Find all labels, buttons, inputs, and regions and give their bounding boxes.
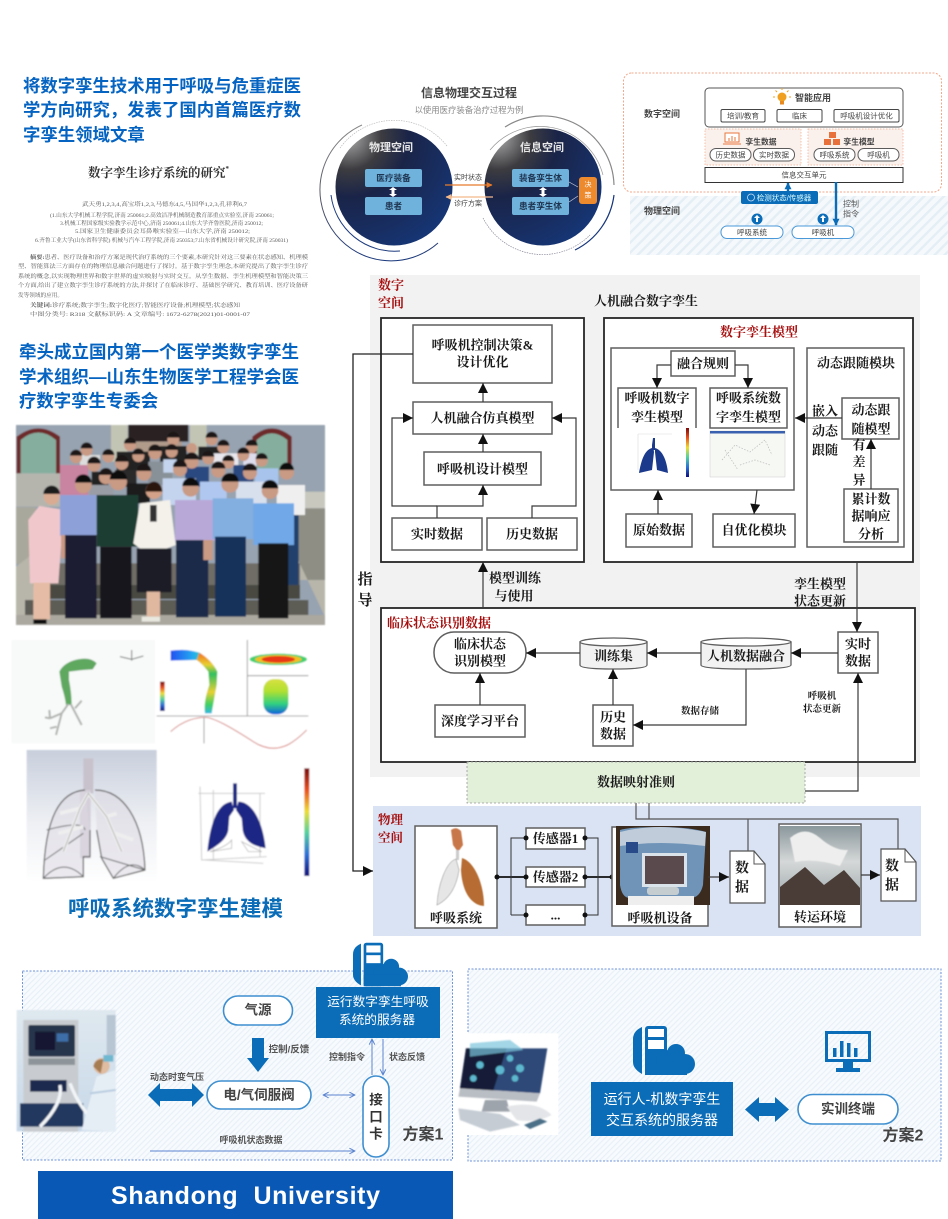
paper abstract: 摘要: 患者、医疗设备和治疗方案是现代治疗系统的三个要素,本研究针对这三要素在状态感知、机理模 <box>30 253 309 261</box>
diagram title: 信息物理交互过程 <box>421 85 517 100</box>
block: real-time data: 实时数据 <box>411 526 463 542</box>
server box <box>316 987 440 1038</box>
paper title: * <box>226 165 230 173</box>
block: raw data: 原始数据 <box>633 522 685 538</box>
label: guidance <box>357 570 373 609</box>
label: ventilator state data: 呼吸机状态数据 <box>219 1134 283 1145</box>
orbit rings <box>320 116 614 261</box>
fusion group <box>611 348 794 490</box>
paper authors and affiliations: 5.国家卫生健康委员会耳鼻喉实验室—山东大学,济南 250012; <box>75 227 251 235</box>
paper abstract: 型、智能算法三方面存在的物理信息融合问题进行了探讨。基于数字孪生理念,本研究提出了数字孪生诊疗 <box>18 262 309 270</box>
smart application panel <box>705 88 903 127</box>
heading: first research statement: 将数字孪生技术用于呼吸与危重症医 <box>23 76 301 96</box>
document: data <box>730 851 765 903</box>
exchange arrows: 诊疗方案 <box>454 198 482 208</box>
block: ventilator design model: 呼吸机设计模型 <box>437 462 528 476</box>
back row hair <box>70 432 268 475</box>
block: raw data <box>626 514 692 547</box>
arrow: uplink <box>787 183 789 191</box>
label: embed tracking: 动态 <box>812 424 839 438</box>
decision box <box>569 177 597 204</box>
panel: clinical state recognition <box>381 608 915 762</box>
icon: cubes <box>824 132 840 145</box>
respiratory system pill: 呼吸系统 <box>737 227 767 237</box>
paper title: 数字孪生诊疗系统的研究 <box>88 166 226 180</box>
server box: 系统的服务器 <box>339 1012 415 1027</box>
label: model training and use: 模型训练 <box>489 570 542 586</box>
icon: monitor chart <box>723 133 741 144</box>
gas source pill: 气源 <box>244 1002 272 1018</box>
footer: Shandong University <box>38 1171 453 1219</box>
paper authors and affiliations: 3.机械工程国家级实验教学示范中心,济南 250061;4.山东大学齐鲁医院,济南 250012; <box>60 219 264 227</box>
block: historical data: 数据 <box>600 726 626 742</box>
icon: cloud server <box>353 943 408 986</box>
twin model panel: 孪生模型 <box>843 136 875 146</box>
digital space dashed frame <box>624 73 942 192</box>
label: embed tracking: 嵌入 <box>812 404 838 418</box>
panel heading: 临床状态识别数据 <box>387 616 491 630</box>
training terminal pill: 实训终端 <box>821 1100 875 1116</box>
arrow: model training <box>482 562 484 608</box>
interface card pill: 口 <box>369 1110 383 1124</box>
block: tracking model: 动态跟 <box>851 402 891 418</box>
physical space label: 物理空间 <box>644 205 680 216</box>
fat double arrow: airway pressure <box>148 1083 204 1107</box>
heading: academic organisation: 学术组织—山东生物医学工程学会医 <box>19 367 299 387</box>
physical space label <box>378 812 404 845</box>
block: historical data: 历史数据 <box>506 526 558 542</box>
label: embed tracking: 跟随 <box>812 442 838 458</box>
label: data storage: 数据存储 <box>681 705 719 717</box>
scheme 1 label: 方案1 <box>403 1124 444 1144</box>
block: transport environment: 转运环境 <box>794 910 846 924</box>
arrows <box>480 653 838 725</box>
heading: first research statement: 字孪生领域文章 <box>23 125 145 145</box>
smart application panel: 智能应用 <box>795 92 831 103</box>
block: real-time data: 实时 <box>845 636 871 652</box>
block: control decision: 呼吸机控制决策& <box>432 338 534 352</box>
block: respiratory system <box>415 826 497 928</box>
block: fusion simulation model: 人机融合仿真模型 <box>430 410 535 426</box>
label: ventilator state update <box>803 690 841 715</box>
diagram: system architecture <box>624 73 948 255</box>
arrow: state data line <box>150 1150 355 1152</box>
document: data <box>881 849 916 901</box>
thin arrows: control and state <box>372 1039 383 1075</box>
label: ventilator state update: 呼吸机 <box>808 690 837 702</box>
gas source pill <box>224 996 292 1025</box>
paper abstract: 关键词: 诊疗系统;数字孪生;数字化医疗;智能医疗设备;机理模型;状态感知 <box>30 301 241 309</box>
block: cumulative response analysis: 累计数 <box>851 492 891 506</box>
block: ventilator device <box>612 826 710 926</box>
arrow: environment to data <box>861 874 880 876</box>
information space circle <box>484 128 602 246</box>
sensors: 传感器1 <box>533 831 578 846</box>
smart application panel: 呼吸机设计优化 <box>840 110 893 120</box>
decision box: 策 <box>584 190 592 200</box>
label: has difference: 有 <box>852 438 866 452</box>
block: deep learning platform: 深度学习平台 <box>441 714 520 728</box>
exchange arrows <box>445 172 493 208</box>
figures: airway CFD and lung models <box>12 640 315 887</box>
paper authors and affiliations: (1.山东大学机械工程学院,济南 250061;2.高效洁净机械制造教育部重点实验室,济南 250061; <box>50 211 275 219</box>
interface card pill: 卡 <box>369 1126 383 1142</box>
panel: scheme 1 <box>17 943 452 1160</box>
servo valve pill: 电/气伺服阀 <box>223 1088 295 1102</box>
cylinder: training set: 训练集 <box>594 648 633 664</box>
fat arrow: control down <box>247 1038 269 1072</box>
block: ventilator twin <box>618 388 696 428</box>
physical space circle: 医疗装备 <box>376 172 411 183</box>
label: twin model state update <box>794 576 846 608</box>
block: ventilator twin: 呼吸机数字 <box>624 390 690 406</box>
connector arrows between panels <box>353 354 858 871</box>
arrow: embed into fusion group <box>795 417 842 419</box>
server box <box>591 1082 733 1136</box>
block: ventilator design model <box>424 452 541 485</box>
physical space label: 物理 <box>378 812 404 827</box>
paper abstract: 中图分类号: R318 文献标识码: A 文章编号: 1672-6278(2021)01-0001-07 <box>30 310 250 318</box>
icon: monitor <box>826 1032 870 1072</box>
physical space circle: 物理空间 <box>369 140 413 154</box>
label: ventilator state update: 状态更新 <box>803 703 841 715</box>
arrows <box>657 365 748 388</box>
block: self-optimization <box>713 514 795 547</box>
interface card pill: 接 <box>369 1092 383 1108</box>
label: twin model state update: 孪生模型 <box>794 576 846 592</box>
paper abstract: 发等领域的应用。 <box>18 291 63 299</box>
paper abstract: 系统的概念,以实现物理世界和数字世界的虚实映射与实时交互。从孪生数据、孪生机理模型和智能决策三 <box>18 272 309 280</box>
panel: digital twin model <box>604 318 913 562</box>
information interaction unit <box>705 168 903 182</box>
arrow: control downlink <box>835 182 837 225</box>
icon: light bulb <box>773 88 791 104</box>
arrow: guidance to physical space <box>353 354 413 871</box>
label: model training and use: 与使用 <box>494 588 534 604</box>
dynamic tracking module <box>807 348 904 547</box>
physical space label: 空间 <box>378 830 403 845</box>
twin data panel <box>705 129 801 165</box>
label: embed tracking <box>812 404 839 458</box>
data mapping rule: 数据映射准则 <box>597 774 675 790</box>
control instruction label: 控制 <box>843 198 859 208</box>
servo valve pill <box>207 1081 311 1109</box>
paper excerpt <box>18 165 309 318</box>
dynamic tracking module: 动态跟随模块 <box>817 356 895 370</box>
sensors: 传感器2 <box>533 870 578 884</box>
digital space label: 数字空间 <box>644 108 680 119</box>
twin data panel: 孪生数据 <box>745 136 777 146</box>
panel: human-machine simulation <box>381 318 584 562</box>
paper authors and affiliations: 6.齐鲁工业大学(山东省科学院) 机械与汽车工程学院,济南 250353;7.山东省机械设计研究院,济南 250031) <box>35 236 288 244</box>
block: clinical recognition model: 识别模型 <box>454 654 506 668</box>
icon: upload ventilator <box>818 214 828 224</box>
block: real-time data: 数据 <box>845 654 871 668</box>
twin model panel <box>808 129 903 165</box>
digital space label: 空间 <box>378 296 404 310</box>
label: has difference: 差 <box>852 454 866 470</box>
paper abstract: 个方面,给出了建立数字孪生诊疗系统的方法,并探讨了在临床诊疗、基础医学研究、教育培训、医疗设备研 <box>18 281 309 289</box>
sensors <box>494 828 614 925</box>
heading: academic organisation: 疗数字孪生专委会 <box>19 391 158 411</box>
computer illustration <box>457 1033 558 1135</box>
diagram title: 人机融合数字孪生 <box>594 294 698 308</box>
physical space hatched band <box>630 196 948 255</box>
server box: 运行数字孪生呼吸 <box>327 994 429 1009</box>
icon: upload respiratory system <box>752 214 762 224</box>
heading: academic organisation: 牵头成立国内第一个医学类数字孪生 <box>19 342 299 362</box>
diagram: cyber-physical interaction process <box>320 85 614 261</box>
information space circle: 装备孪生体 <box>519 172 562 183</box>
control instruction label: 指令 <box>843 208 859 218</box>
block: self-optimization: 自优化模块 <box>721 522 787 538</box>
arrow: difference feedback <box>870 439 872 489</box>
respiratory system pill <box>721 226 783 238</box>
smart application panel: 临床 <box>792 110 807 120</box>
twin data panel: 实时数据 <box>759 150 789 160</box>
panel: scheme 2 <box>457 969 941 1161</box>
sensor bar <box>741 191 818 204</box>
diagram subtitle: 以使用医疗装备治疗过程为例 <box>415 105 523 115</box>
document: data: 据 <box>885 876 899 894</box>
label: has difference: 异 <box>852 472 866 488</box>
digital space label <box>378 278 404 310</box>
block: tracking model: 随模型 <box>851 422 891 436</box>
heading: academic organisation <box>19 342 299 411</box>
label: guidance: 指 <box>357 570 373 588</box>
block: fusion rules <box>671 351 735 376</box>
scheme 2 label: 方案2 <box>883 1126 924 1144</box>
block: historical data: 历史 <box>600 710 626 724</box>
footer: Shandong University: Shandong University <box>111 1182 380 1210</box>
block: ventilator twin: 孪生模型 <box>631 410 683 424</box>
digital space label: 数字 <box>378 278 404 292</box>
front row <box>28 506 62 583</box>
heading: first research statement: 学方向研究，发表了国内首篇医疗数 <box>23 100 302 120</box>
label: guidance: 导 <box>357 592 373 609</box>
heading: first research statement <box>23 76 302 145</box>
decision box: 决 <box>584 180 592 188</box>
back row clothing <box>60 446 278 505</box>
server box: 运行人-机数字孪生 <box>604 1091 720 1107</box>
panel: physical space <box>373 803 921 936</box>
block: fusion simulation model <box>413 402 552 434</box>
physical space circle <box>336 128 452 246</box>
group photo <box>16 425 325 625</box>
paper abstract <box>18 253 309 318</box>
block: real-time data <box>392 518 482 550</box>
block: clinical recognition model: 临床状态 <box>454 636 507 652</box>
block: real-time data <box>838 632 878 673</box>
document: data: 数 <box>885 858 899 874</box>
arrow: to self-optimization <box>754 490 757 514</box>
arrow: twin state update <box>856 562 858 632</box>
label: state feedback: 状态反馈 <box>389 1051 425 1062</box>
paper authors and affiliations: 武天勇1,2,3,4,高宝塔1,2,3,马德东4,5,马国华1,2,3,孔祥利6,7 <box>82 200 247 208</box>
information interaction unit: 信息交互单元 <box>782 170 827 180</box>
twin model panel: 呼吸机 <box>867 150 890 160</box>
label: dynamic pressure: 动态时变气压 <box>150 1071 204 1082</box>
interface card pill <box>363 1076 389 1157</box>
physical space circle: 患者 <box>385 200 402 211</box>
exchange arrows: 实时状态 <box>454 172 482 182</box>
document: data: 据 <box>735 878 749 896</box>
arrow: mapping to real-time data <box>805 673 858 791</box>
central digital twin diagram background <box>370 275 920 777</box>
cylinder: human-machine data fusion: 人机数据融合 <box>707 648 785 664</box>
cylinder: training set <box>580 638 647 669</box>
chart: software screenshot <box>710 431 785 477</box>
twin model panel: 呼吸系统 <box>820 150 850 160</box>
icon: lungs <box>437 828 484 906</box>
back row heads <box>70 433 268 484</box>
block: fusion rules: 融合规则 <box>677 356 729 371</box>
block: cumulative response analysis: 分析 <box>858 526 884 542</box>
label: twin model state update: 状态更新 <box>794 594 846 608</box>
information space circle: 信息空间 <box>520 140 564 154</box>
arrows <box>392 383 576 518</box>
block: control decision: 设计优化 <box>456 354 509 370</box>
block: control decision <box>413 325 552 383</box>
smart application panel: 培训/教育 <box>727 110 760 120</box>
block: respiratory twin: 字孪生模型 <box>716 410 781 424</box>
block: deep learning platform <box>435 705 525 737</box>
thin double arrow <box>323 1094 355 1096</box>
training terminal pill <box>798 1094 898 1124</box>
information space circle: 患者孪生体 <box>519 200 562 211</box>
sensors: ... <box>551 908 560 922</box>
block: cumulative response analysis <box>844 489 898 542</box>
control instruction label <box>843 198 859 218</box>
panel heading: 数字孪生模型 <box>720 324 798 340</box>
label: control command: 控制指令 <box>329 1051 365 1062</box>
block: respiratory twin: 呼吸系统数 <box>716 390 781 406</box>
chart: lung thumbnail <box>638 428 689 477</box>
block: cumulative response analysis: 据响应 <box>851 508 891 524</box>
block: ventilator device: 呼吸机设备 <box>627 910 693 926</box>
paper authors and affiliations <box>35 200 288 244</box>
block: tracking model <box>842 398 899 439</box>
fat double arrow <box>745 1097 789 1122</box>
document: data: 数 <box>735 860 749 876</box>
data mapping lines <box>636 803 898 851</box>
data mapping rule <box>467 762 805 803</box>
label: model training and use <box>489 570 542 604</box>
block: respiratory system: 呼吸系统 <box>430 910 483 926</box>
cylinder: human-machine data fusion <box>701 638 791 669</box>
arrow: raw data up <box>657 490 659 514</box>
block: historical data <box>487 518 577 550</box>
server box: 交互系统的服务器 <box>606 1112 718 1128</box>
label: control feedback: 控制/反馈 <box>269 1044 310 1056</box>
ventilator patient photo <box>17 1010 116 1132</box>
twin data panel: 历史数据 <box>716 150 746 160</box>
block: clinical recognition model <box>434 632 526 673</box>
block: transport environment <box>779 824 861 927</box>
ventilator pill <box>792 226 854 238</box>
block: respiratory twin <box>710 388 787 428</box>
label: has difference <box>852 438 866 488</box>
heading: respiratory system modeling: 呼吸系统数字孪生建模 <box>68 896 284 921</box>
ventilator pill: 呼吸机 <box>812 227 835 237</box>
icon: cloud server <box>633 1026 695 1075</box>
sensor bar: 检测状态/传感器 <box>757 192 812 202</box>
block: historical data <box>593 705 633 746</box>
arrow: ventilator to data <box>708 876 729 878</box>
